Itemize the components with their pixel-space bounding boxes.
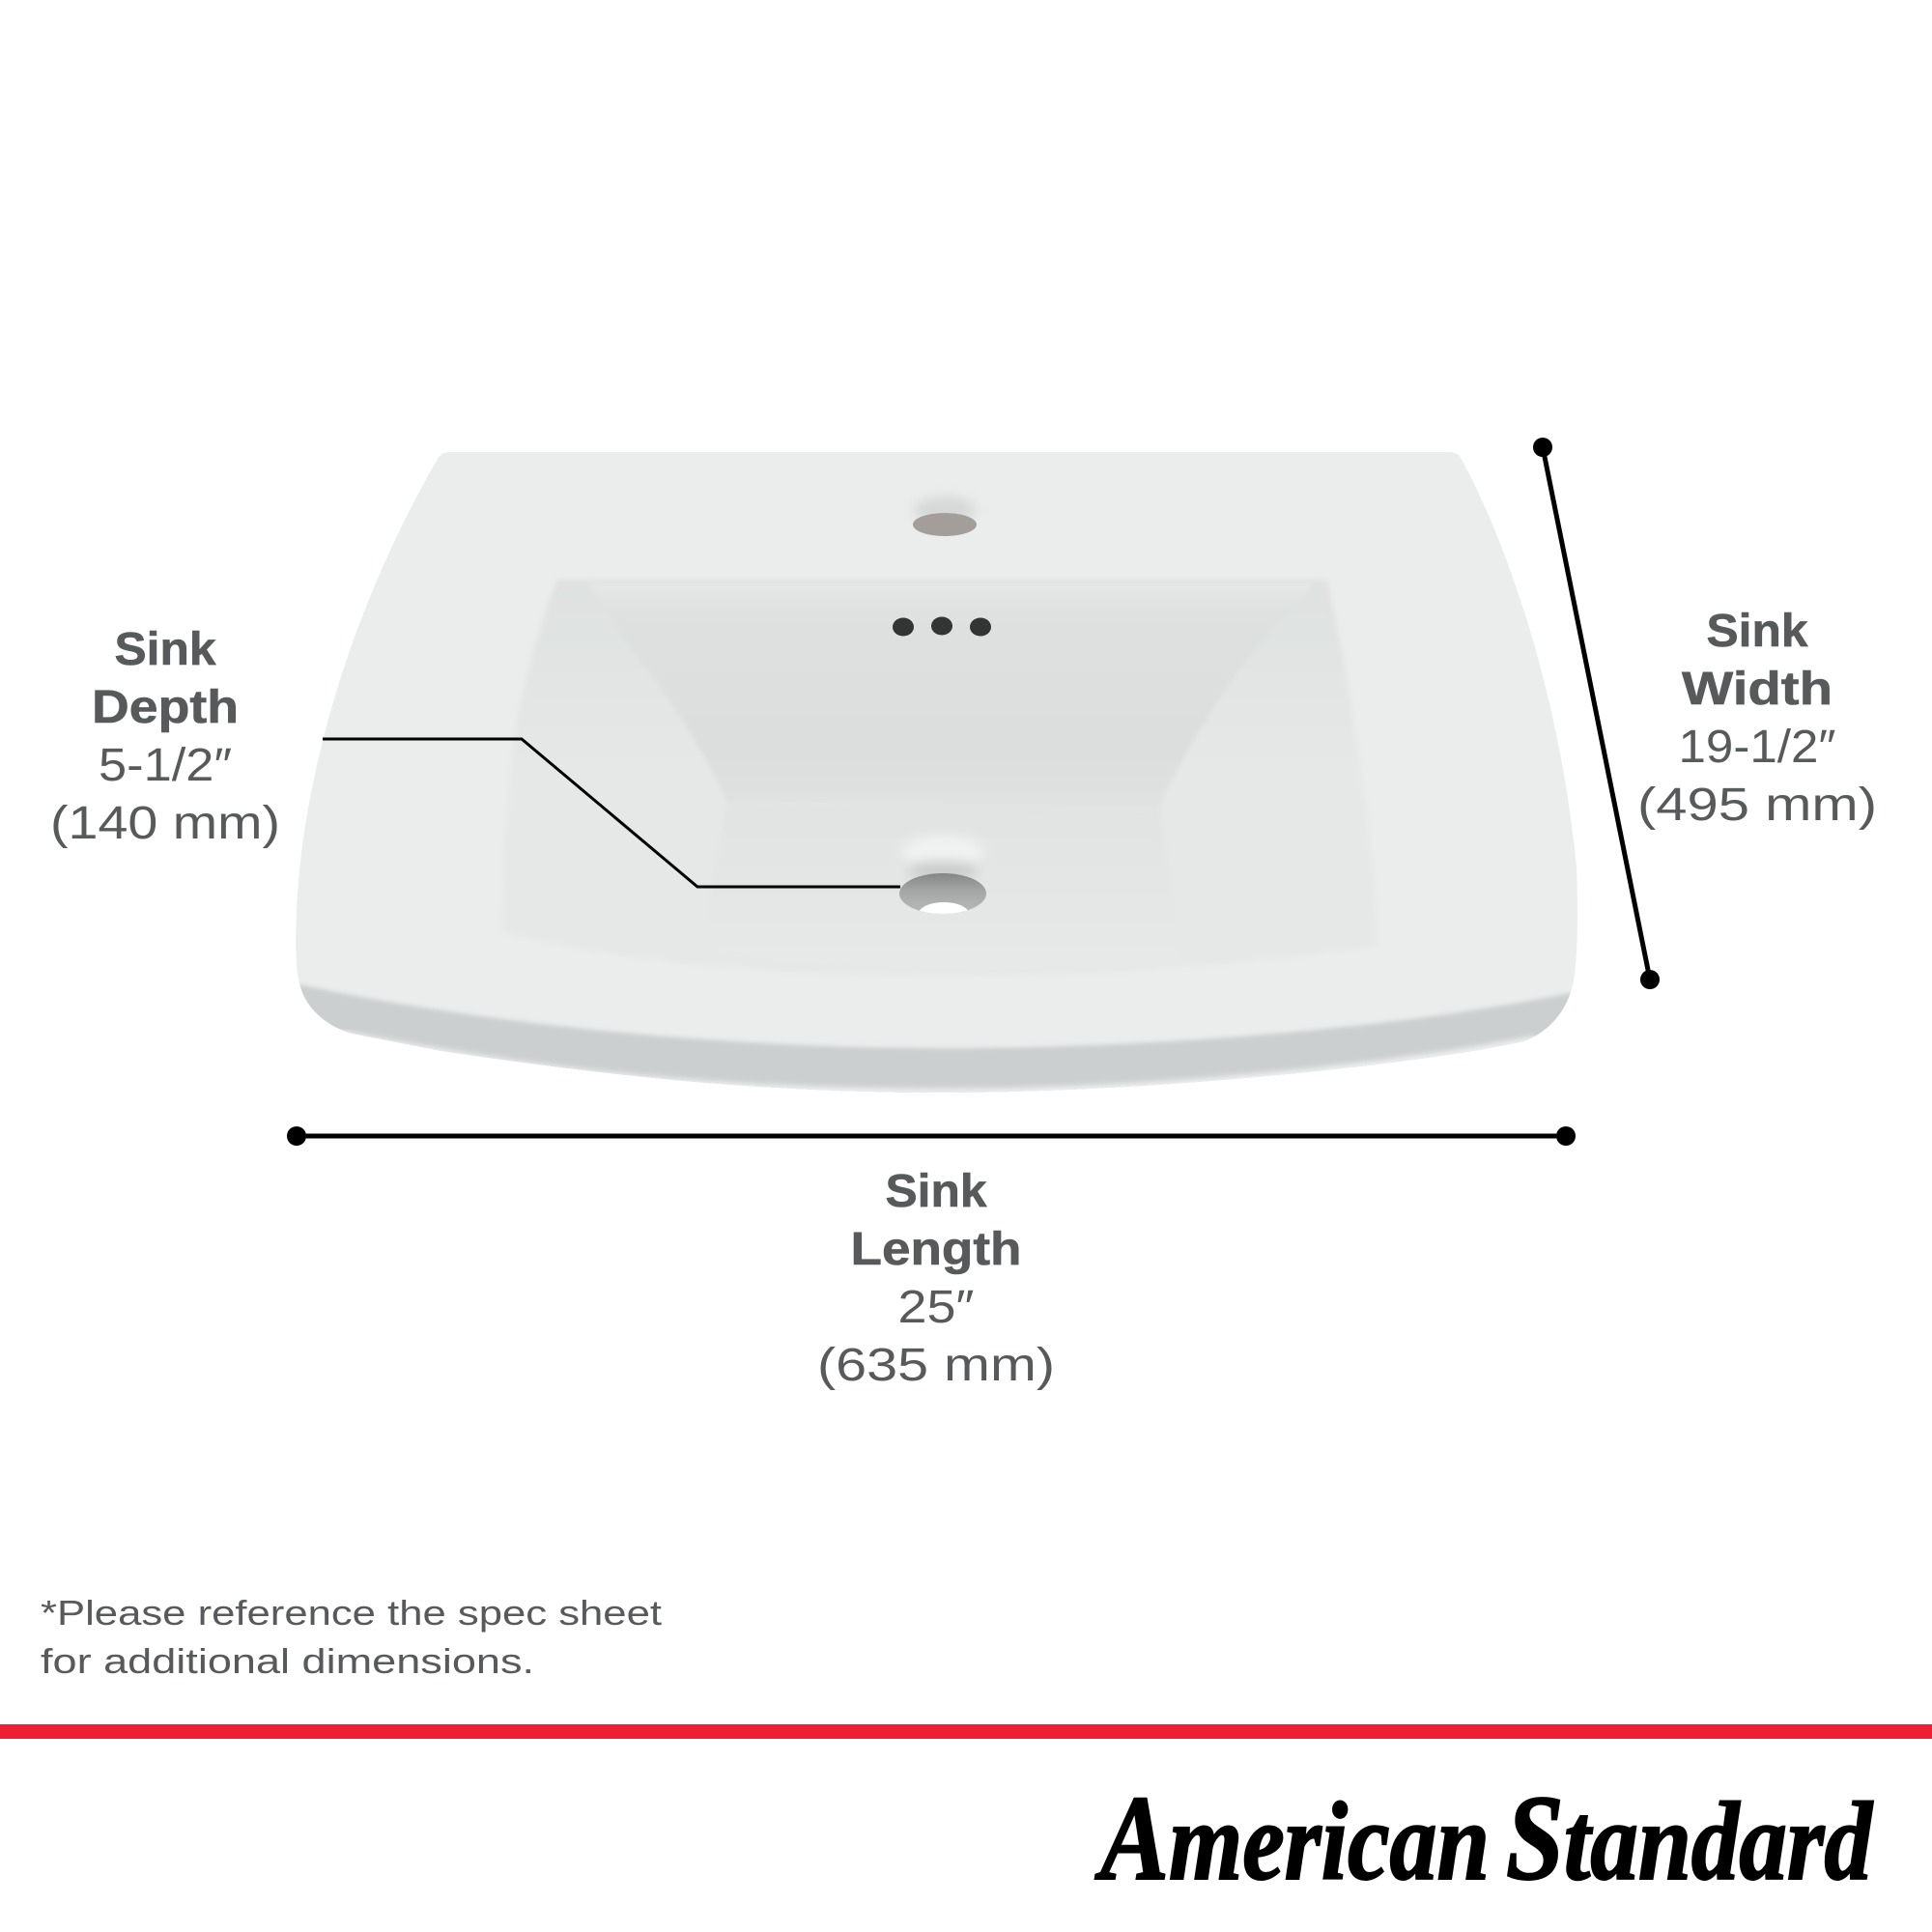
label: sink width: 19-1/2″ <box>1679 722 1836 773</box>
logo: American Standard: Standard <box>1506 1772 1874 1906</box>
label: sink length <box>817 1166 1055 1391</box>
basin <box>502 580 1378 976</box>
basin floor <box>697 804 1184 970</box>
basin outline walls <box>502 580 1378 976</box>
label: sink depth: Sink <box>114 624 216 675</box>
label: sink depth: 5-1/2″ <box>99 740 232 791</box>
logo: American Standard: American <box>1094 1772 1490 1906</box>
dimension line: sink length <box>287 1126 1576 1146</box>
label: sink width <box>1637 606 1877 831</box>
logo: American Standard <box>1094 1772 1874 1906</box>
back wall <box>589 583 1314 808</box>
faucet hole <box>913 497 977 536</box>
overflow holes <box>893 616 991 636</box>
label: sink depth: Depth <box>92 682 239 733</box>
label: sink length: (635 mm) <box>817 1340 1055 1391</box>
leader line: sink depth <box>323 739 900 887</box>
footnote <box>41 1593 662 1681</box>
sink body <box>296 452 1577 1093</box>
sink illustration <box>290 452 1584 1106</box>
drain <box>899 837 986 914</box>
label: sink width: (495 mm) <box>1637 780 1877 831</box>
label: sink length: Sink <box>885 1166 987 1217</box>
label: sink width: Sink <box>1706 606 1808 657</box>
footnote: for additional dimensions. <box>41 1641 534 1681</box>
footnote: *Please reference the spec sheet <box>41 1593 662 1633</box>
red divider bar <box>0 1724 1932 1739</box>
dimension line: sink width <box>1533 438 1660 989</box>
label: sink length: 25″ <box>898 1282 974 1333</box>
label: sink length: Length <box>850 1224 1022 1275</box>
label: sink depth: (140 mm) <box>50 798 280 849</box>
label: sink depth <box>50 624 280 849</box>
label: sink width: Width <box>1682 664 1833 715</box>
sink front lip <box>299 983 1571 1093</box>
